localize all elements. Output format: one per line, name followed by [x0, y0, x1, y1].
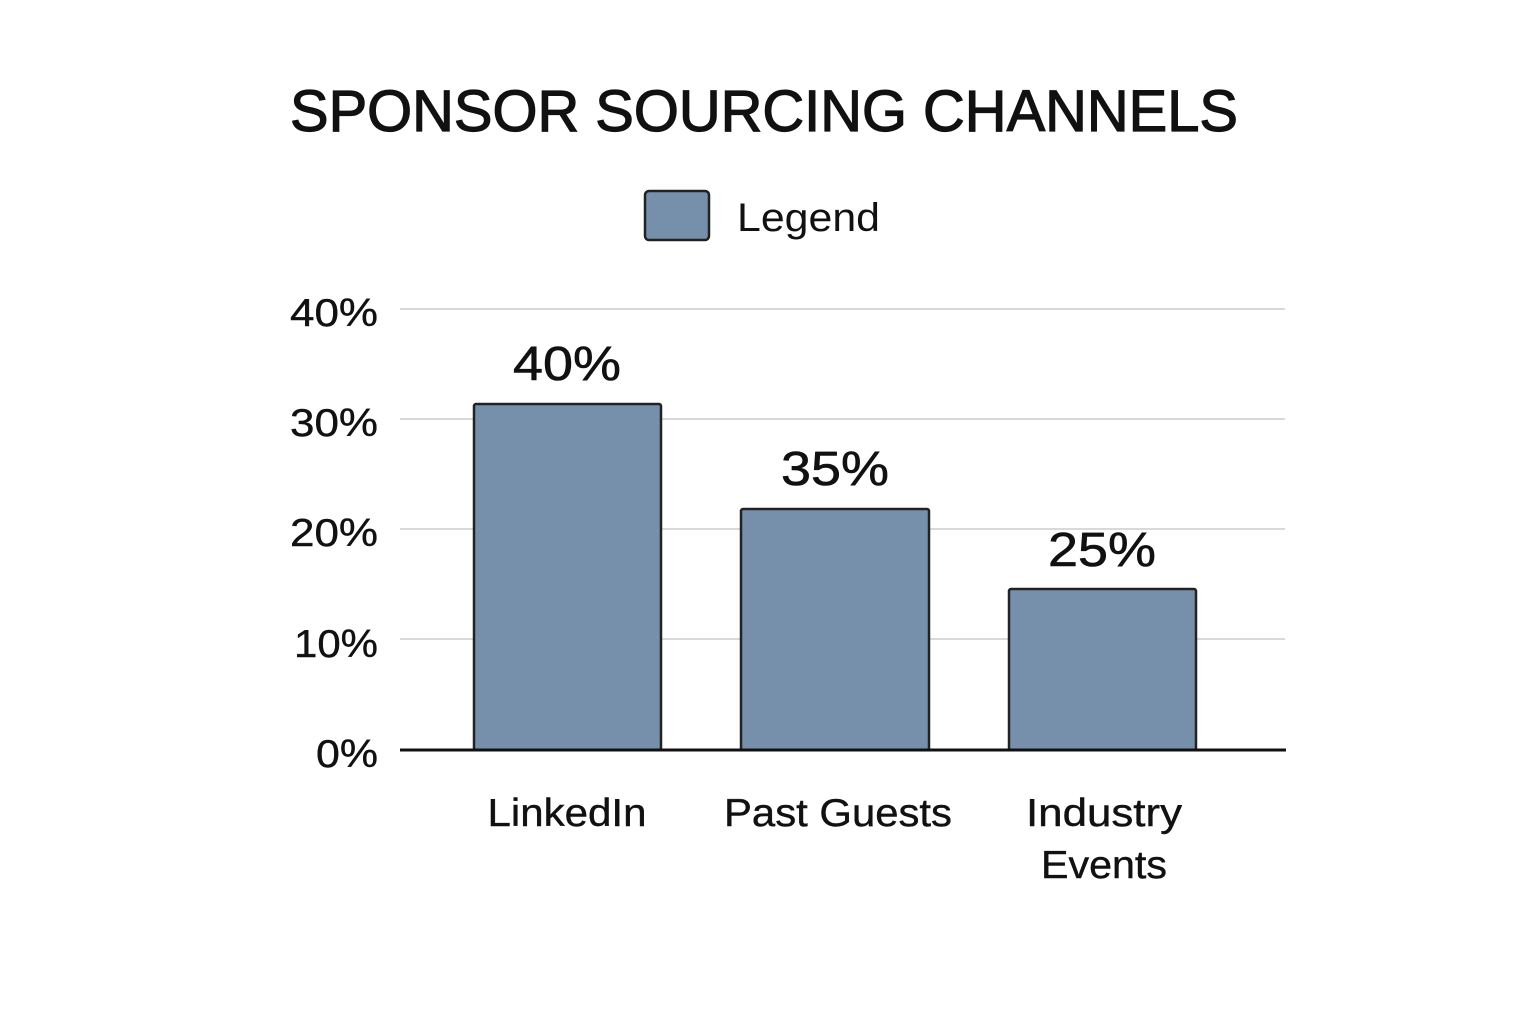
y-axis labels: 0% — [316, 733, 378, 776]
y-axis labels: 30% — [290, 402, 378, 445]
bar: Past Guests — [741, 509, 929, 750]
y-axis labels: 10% — [294, 623, 378, 666]
value labels — [513, 338, 1156, 577]
y-axis labels — [290, 292, 378, 776]
bar: LinkedIn — [474, 404, 661, 750]
category labels: Events — [1041, 844, 1167, 887]
y-axis labels: 20% — [290, 512, 378, 555]
y-axis labels: 40% — [290, 292, 378, 335]
category labels: Past Guests — [724, 792, 952, 835]
value labels: 25% — [1048, 524, 1156, 577]
x-axis baseline — [400, 748, 1286, 752]
gridlines — [400, 309, 1285, 639]
title: SPONSOR SOURCING CHANNELS — [290, 79, 1238, 144]
legend — [645, 191, 880, 240]
value labels: 40% — [513, 338, 621, 391]
category labels: LinkedIn — [488, 792, 646, 835]
legend: Legend — [737, 196, 880, 240]
category labels: Industry — [1026, 792, 1183, 835]
category labels — [488, 792, 1183, 887]
value labels: 35% — [781, 443, 889, 496]
bar chart — [474, 404, 1196, 750]
bar: Industry Events — [1009, 589, 1196, 750]
